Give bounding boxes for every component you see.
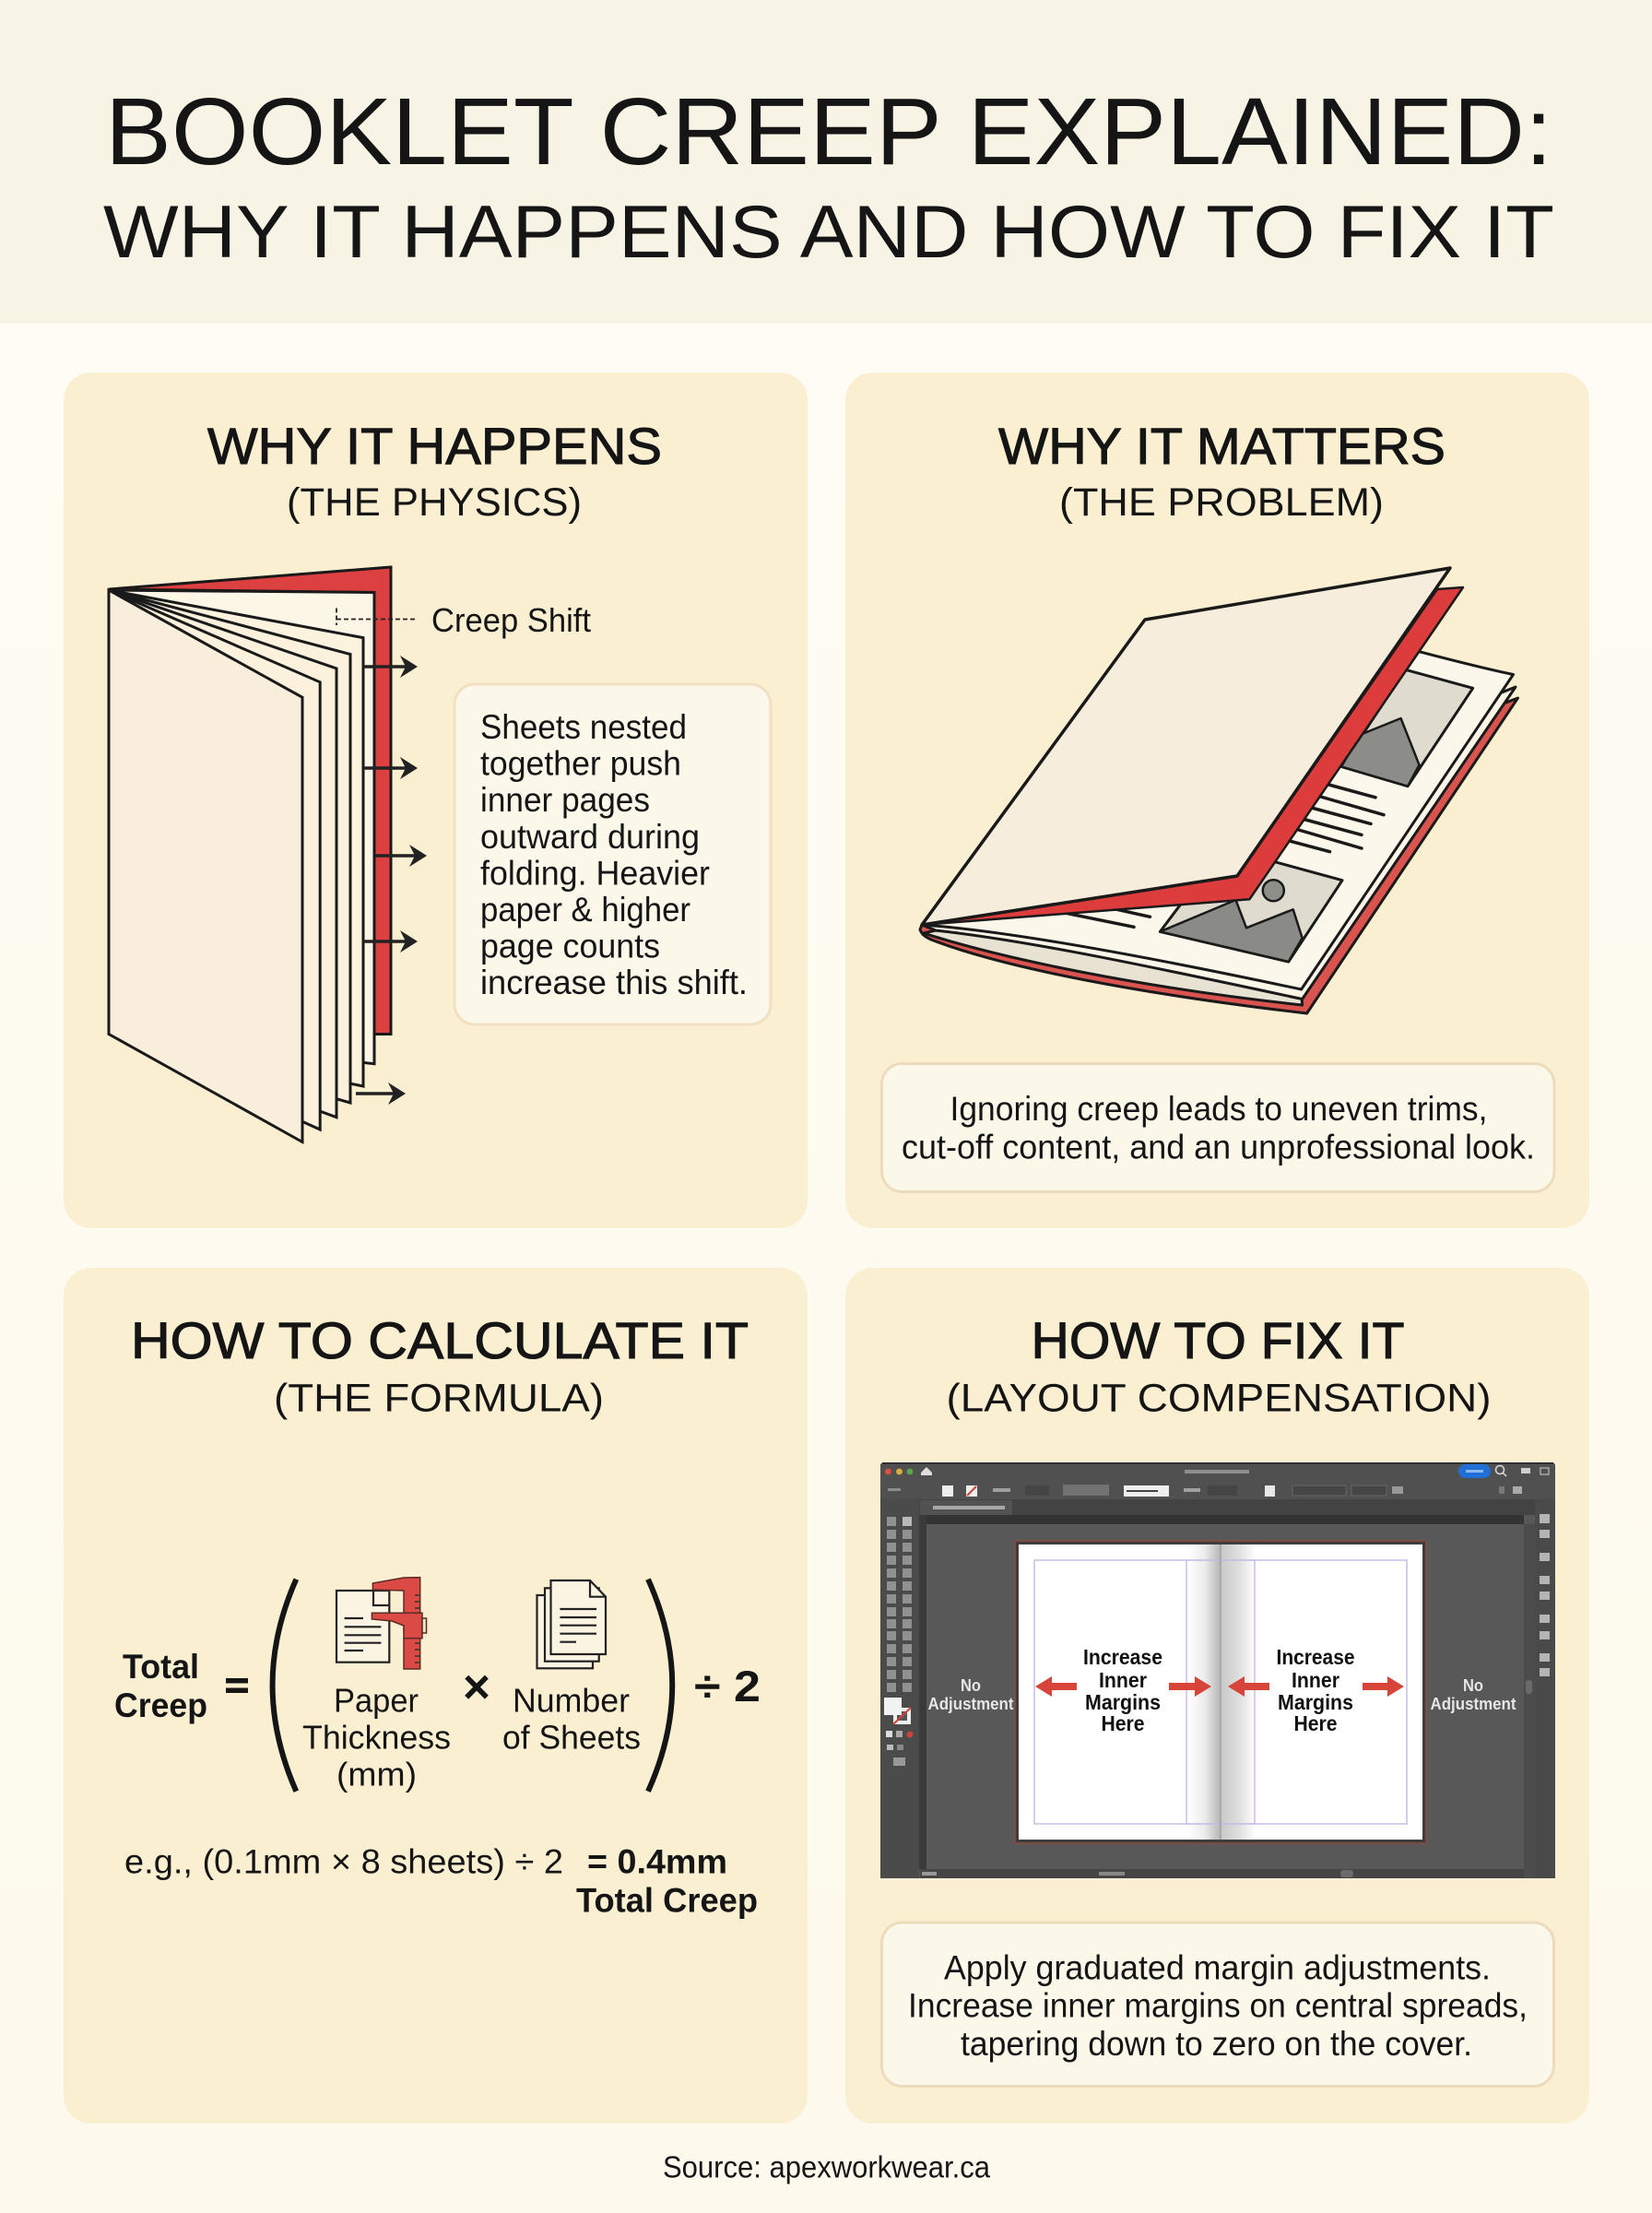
top picture — [1341, 669, 1473, 787]
formula — [114, 1578, 761, 1793]
callout: physics explanation: page counts — [480, 928, 660, 964]
label: increase inner margins left: Increase — [1083, 1645, 1162, 1669]
label: total creep — [114, 1648, 207, 1724]
title line 2: WHY IT HAPPENS AND HOW TO FIX IT — [103, 191, 1554, 274]
options toolbar — [880, 1481, 1555, 1499]
heading: how to fix it: HOW TO FIX IT — [1031, 1311, 1405, 1369]
label: no adjustment left: Adjustment — [927, 1695, 1014, 1713]
red inside cover — [922, 587, 1463, 925]
multiply sign: × — [463, 1661, 490, 1714]
worked example — [124, 1843, 758, 1919]
icon: stacked sheets — [537, 1580, 606, 1668]
right parenthesis — [648, 1580, 672, 1792]
arrows: outward push — [356, 656, 427, 1105]
right dock and scrollbars — [920, 1499, 1555, 1878]
heading: why it matters: WHY IT MATTERS — [998, 417, 1446, 475]
label: increase inner margins left — [1083, 1645, 1162, 1735]
label: number of sheets: of Sheets — [502, 1719, 641, 1757]
callout: the fix — [881, 1923, 1554, 2086]
title banner — [0, 0, 1652, 324]
label: paper thickness: Paper — [334, 1682, 419, 1720]
label: increase inner margins left: Inner — [1099, 1668, 1147, 1692]
label: increase inner margins right: Here — [1294, 1711, 1337, 1735]
layout software screenshot — [880, 1462, 1555, 1878]
left parenthesis — [273, 1580, 296, 1792]
label: no adjustment right: No — [1463, 1676, 1483, 1695]
worked example: = 0.4mm — [587, 1843, 727, 1881]
heading: why it happens — [207, 417, 662, 525]
heading: how to fix it — [946, 1311, 1492, 1420]
callout: physics explanation: together push — [480, 745, 681, 782]
label: no adjustment left — [927, 1676, 1014, 1713]
tab bar and rulers — [880, 1499, 1555, 1869]
callout: physics explanation: paper & higher — [480, 891, 690, 929]
top page — [922, 652, 1514, 989]
callout: physics explanation: folding. Heavier — [480, 854, 710, 893]
heading: why it matters — [998, 417, 1446, 525]
label: paper thickness — [302, 1682, 451, 1793]
label: increase inner margins right: Increase — [1276, 1645, 1355, 1669]
label: creep shift: Creep Shift — [431, 601, 591, 639]
label: paper thickness: (mm) — [336, 1756, 417, 1793]
callout: problem: cut-off content, and an unprofessional look. — [902, 1129, 1535, 1166]
callout: physics explanation: outward during — [480, 818, 700, 856]
label: no adjustment left: No — [961, 1676, 981, 1695]
heading: how to calculate it: (THE FORMULA) — [274, 1376, 604, 1420]
label: number of sheets: Number — [513, 1682, 630, 1720]
arrows: increase inner margins — [1035, 1676, 1404, 1697]
panel: why it happens — [64, 373, 808, 1228]
bottom picture — [1160, 862, 1342, 962]
shaded inner spread — [924, 930, 1303, 1005]
label: paper thickness: Thickness — [302, 1719, 451, 1757]
label: number of sheets — [502, 1682, 641, 1757]
creep shift dashed marker — [336, 609, 418, 625]
heading: why it matters: (THE PROBLEM) — [1059, 480, 1384, 525]
label: increase inner margins right: Inner — [1292, 1668, 1339, 1692]
label: increase inner margins left: Margins — [1085, 1690, 1161, 1714]
label: increase inner margins left: Here — [1101, 1711, 1145, 1735]
source line: Source: apexworkwear.ca — [663, 2150, 991, 2183]
heading: how to fix it: (LAYOUT COMPENSATION) — [946, 1376, 1492, 1420]
title bar — [880, 1462, 1555, 1481]
equals sign — [226, 1678, 248, 1693]
worked example: Total Creep — [576, 1881, 758, 1919]
panel: how to calculate it — [64, 1268, 808, 2124]
callout: problem — [881, 1064, 1554, 1191]
text lines on page — [1064, 785, 1384, 927]
heading: how to calculate it: HOW TO CALCULATE IT — [131, 1311, 749, 1369]
callout: physics explanation — [454, 684, 771, 1024]
back cover — [920, 698, 1517, 1013]
second page — [922, 687, 1516, 1000]
left tools panel — [880, 1499, 919, 1878]
callout: problem: Ignoring creep leads to uneven trims, — [950, 1090, 1488, 1128]
worked example: e.g., (0.1mm × 8 sheets) ÷ 2 — [124, 1843, 563, 1881]
callout: physics explanation: inner pages — [480, 781, 650, 819]
label: increase inner margins right: Margins — [1278, 1690, 1353, 1714]
callout: physics explanation: Sheets nested — [480, 708, 687, 746]
booklet side illustration — [109, 567, 391, 1142]
label: no adjustment right: Adjustment — [1431, 1695, 1516, 1713]
document spread — [1015, 1541, 1426, 1843]
panel: how to fix it — [845, 1268, 1589, 2124]
label: no adjustment right — [1431, 1676, 1516, 1713]
heading: how to calculate it — [131, 1311, 749, 1420]
panel: why it matters — [845, 373, 1589, 1228]
heading: why it happens: (THE PHYSICS) — [287, 480, 582, 525]
icon: paper and caliper — [336, 1578, 426, 1669]
label: increase inner margins right — [1276, 1645, 1355, 1735]
front cover — [922, 568, 1450, 925]
callout: the fix: Increase inner margins on central spreads, — [908, 1987, 1528, 2025]
uneven booklet illustration — [920, 568, 1517, 1013]
label: total creep: Creep — [114, 1686, 207, 1724]
callout: the fix: tapering down to zero on the cover. — [961, 2025, 1472, 2063]
callout: physics explanation: increase this shift. — [480, 964, 748, 1001]
label: total creep: Total — [123, 1648, 199, 1686]
callout: the fix: Apply graduated margin adjustments. — [944, 1949, 1491, 1987]
heading: why it happens: WHY IT HAPPENS — [207, 417, 662, 475]
title line 1: BOOKLET CREEP EXPLAINED: — [105, 78, 1552, 184]
divide by two: ÷ 2 — [694, 1662, 761, 1710]
